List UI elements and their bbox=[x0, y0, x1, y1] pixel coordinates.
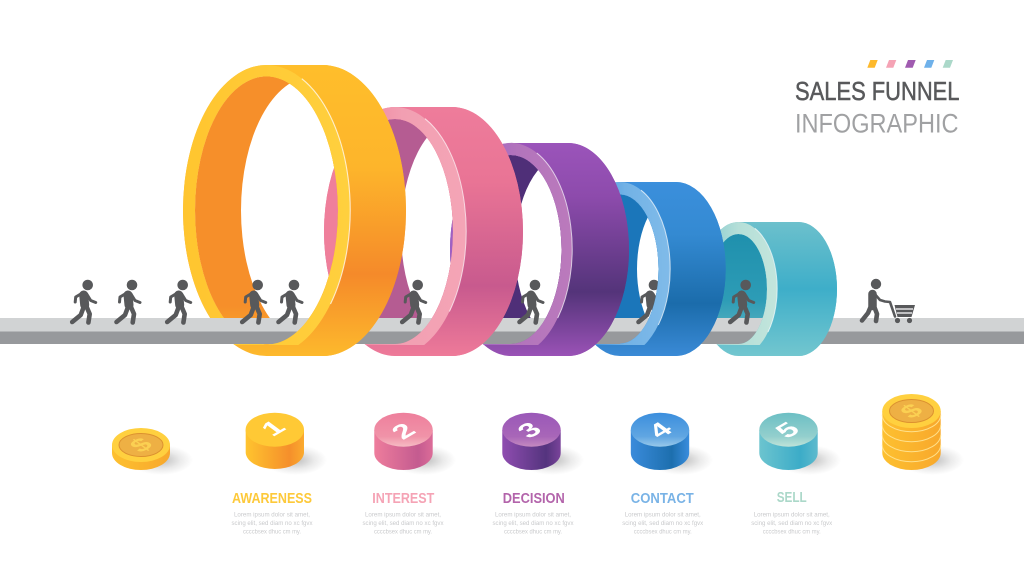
step 3: cylinder: 3 bbox=[511, 417, 548, 442]
step 1: text: AWARENESS bbox=[232, 491, 312, 507]
icon: coin stack: $ bbox=[895, 400, 929, 423]
step 4: text: ccccbsex dhuc cm my. bbox=[634, 528, 692, 535]
step 4: text: Lorem ipsum dolor sit amet, bbox=[625, 512, 701, 518]
icon: single coin: $ bbox=[125, 434, 158, 457]
title: SALES FUNNEL bbox=[795, 78, 960, 106]
step 4: text bbox=[622, 491, 704, 535]
step 3: cylinder bbox=[502, 413, 584, 475]
icon: shopper with cart bbox=[862, 279, 915, 323]
step 2: text: INTEREST bbox=[372, 491, 434, 507]
ring 1: awareness bbox=[0, 60, 420, 360]
step 3: text: scing elit, sed diam no xc fgvx bbox=[492, 520, 574, 527]
title: INFOGRAPHIC bbox=[795, 108, 958, 138]
step 1: cylinder: 1 bbox=[255, 415, 291, 440]
ring 2: interest bbox=[320, 100, 530, 360]
step 1: text: scing elit, sed diam no xc fgvx bbox=[232, 520, 313, 527]
step 1: cylinder bbox=[246, 413, 327, 475]
step 1: text: Lorem ipsum dolor sit amet, bbox=[234, 512, 310, 518]
step 3: text bbox=[492, 491, 574, 535]
step 5: text: Lorem ipsum dolor sit amet, bbox=[754, 512, 830, 518]
ring 4: contact bbox=[595, 182, 726, 356]
icon: coin stack bbox=[882, 394, 964, 475]
step 5: text: ccccbsex dhuc cm my. bbox=[763, 528, 821, 535]
step 4: text: CONTACT bbox=[631, 491, 694, 507]
step 4: text: scing elit, sed diam no xc fgvx bbox=[622, 520, 704, 527]
step 2: text: Lorem ipsum dolor sit amet, bbox=[365, 512, 441, 518]
legend swatches bbox=[867, 60, 953, 68]
ring 3: decision bbox=[450, 142, 629, 356]
title bbox=[795, 78, 960, 138]
step 3: text: Lorem ipsum dolor sit amet, bbox=[495, 512, 571, 518]
step 1: text bbox=[232, 491, 313, 535]
step 2: text bbox=[362, 491, 444, 535]
step 4: cylinder: 4 bbox=[642, 417, 679, 442]
step 5: text bbox=[751, 490, 833, 535]
step 5: cylinder bbox=[759, 413, 841, 475]
step 1: text: ccccbsex dhuc cm my. bbox=[243, 528, 301, 535]
step 5: text: scing elit, sed diam no xc fgvx bbox=[751, 520, 833, 527]
ring 5: sell bbox=[701, 222, 837, 356]
step 2: text: ccccbsex dhuc cm my. bbox=[374, 528, 432, 535]
step 5: cylinder: 5 bbox=[769, 417, 806, 442]
step 5: text: SELL bbox=[777, 490, 807, 506]
step 2: cylinder bbox=[374, 413, 456, 475]
step 2: text: scing elit, sed diam no xc fgvx bbox=[362, 520, 444, 527]
step 2: cylinder: 2 bbox=[385, 418, 422, 443]
step 3: text: ccccbsex dhuc cm my. bbox=[504, 528, 562, 535]
icon: single coin bbox=[112, 428, 193, 475]
road: exit section bbox=[780, 318, 1024, 344]
step 4: cylinder bbox=[631, 413, 713, 475]
step 3: text: DECISION bbox=[503, 491, 565, 507]
